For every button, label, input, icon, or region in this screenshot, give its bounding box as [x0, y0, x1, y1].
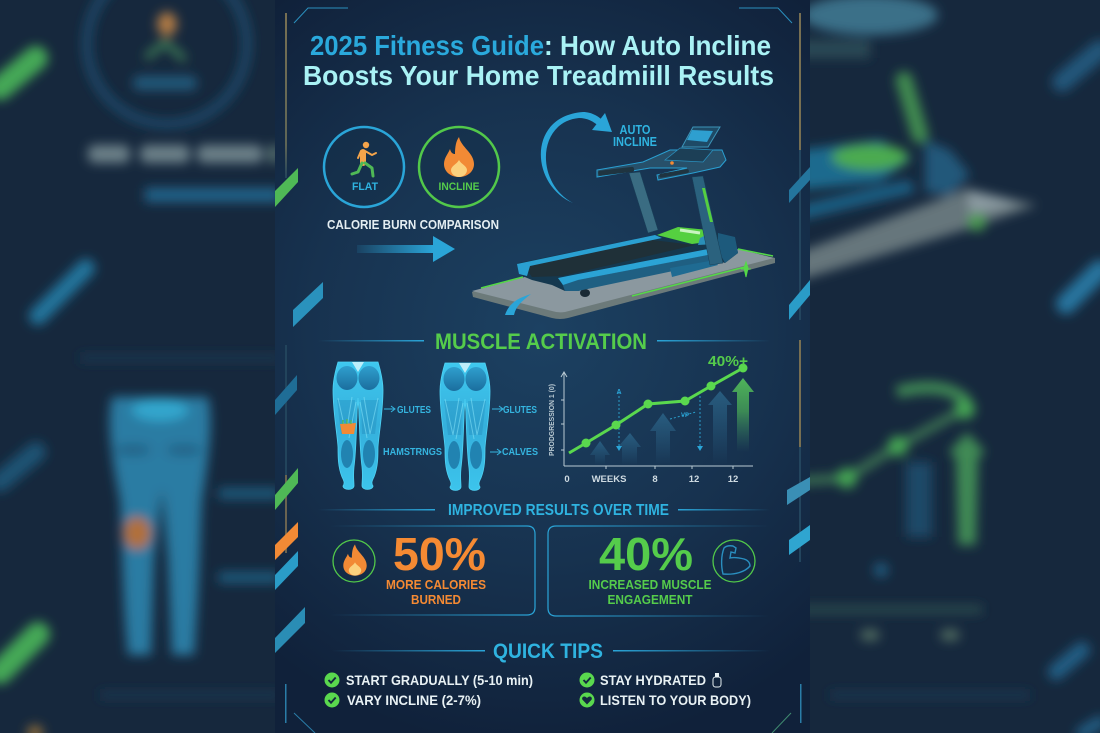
card: calories: MORE CALORIES: [386, 577, 486, 592]
treadmill handlebars: [597, 150, 726, 180]
auto incline label: INCLINE: [613, 135, 657, 149]
chart x axis labels: WEEKS: [592, 474, 626, 485]
highlight: knee hotspot: [340, 419, 356, 434]
chart axes: [561, 372, 753, 469]
tip: start gradually: START GRADUALLY (5-10 min): [346, 672, 533, 688]
title: : How Auto Incline: [544, 30, 771, 61]
heading: improved results: IMPROVED RESULTS OVER TIME: [448, 502, 669, 519]
chart line: [569, 368, 743, 453]
tip: stay hydrated: STAY HYDRATED: [600, 672, 706, 688]
tips list: [324, 672, 751, 708]
calorie comparison label: CALORIE BURN COMPARISON: [327, 218, 499, 232]
treadmill console: [665, 127, 720, 162]
muscle labels: HAMSTRNGS: [383, 447, 442, 458]
chart x axis labels: 12: [728, 474, 738, 485]
treadmill uprights: [629, 172, 723, 265]
blurred right backdrop artwork: [800, 0, 1100, 733]
side accent stripes: [275, 167, 810, 653]
heading: muscle activation: MUSCLE ACTIVATION: [435, 329, 647, 354]
auto incline label: [613, 123, 657, 149]
card: calories: [330, 526, 535, 615]
blurred left backdrop artwork: [0, 0, 280, 733]
tip: listen to your body: LISTEN TO YOUR BODY): [600, 692, 751, 708]
muscle labels: GLUTES: [397, 405, 431, 416]
title: Boosts Your Home Treadmiill Results: [303, 60, 774, 91]
chart y axis label: PRODGRESSION 1 (0): [547, 384, 556, 456]
icon: flame badge: [333, 540, 375, 582]
treadmill mat: [472, 249, 775, 319]
title: 2025 Fitness Guide: [310, 30, 544, 61]
treadmill deck: [517, 227, 738, 297]
card: calories: 50%: [393, 528, 486, 580]
card: muscle: INCREASED MUSCLE: [588, 577, 712, 592]
incline fire badge: INCLINE: [438, 181, 480, 193]
frame lines and decorative corners: [285, 8, 802, 733]
card: muscle: 40%: [599, 528, 693, 580]
line chart: progress over weeks: A: [616, 389, 622, 396]
muscle labels: GLUTES: [503, 405, 537, 416]
chart x axis labels: 0: [564, 474, 570, 485]
tip: vary incline: VARY INCLINE (2-7%): [347, 692, 481, 708]
muscle labels: CALVES: [502, 447, 538, 458]
line chart: progress over weeks: VP: [681, 413, 689, 419]
arrow: auto incline: [541, 112, 612, 203]
title: [303, 30, 774, 91]
chart x axis labels: [564, 474, 738, 485]
legs diagram: left figure: [333, 362, 383, 489]
auto incline label: AUTO: [620, 123, 651, 137]
line chart: progress over weeks: [547, 353, 754, 485]
chart x axis labels: 8: [652, 474, 658, 485]
icon: flame: [444, 137, 474, 177]
chart x axis labels: 12: [689, 474, 699, 485]
arrow: comparison: [357, 236, 455, 262]
chart growth arrows: [590, 378, 754, 465]
chart value label: 40%+: [708, 353, 748, 370]
icon: flexed arm: [713, 540, 755, 582]
card: muscle: [548, 526, 770, 616]
card: muscle: ENGAGEMENT: [608, 592, 693, 607]
legs diagram: right figure: [440, 363, 490, 490]
flat walking badge: [324, 127, 404, 207]
card: calories: BURNED: [411, 592, 461, 607]
heading: quick tips: QUICK TIPS: [493, 640, 603, 663]
chart dashed markers: [619, 392, 700, 447]
icon: runner: [352, 142, 376, 176]
central poster panel: [275, 0, 810, 733]
flat walking badge: FLAT: [352, 181, 378, 193]
incline fire badge: [419, 127, 499, 207]
muscle labels: [383, 405, 538, 458]
treadmill illustration: [472, 127, 775, 319]
